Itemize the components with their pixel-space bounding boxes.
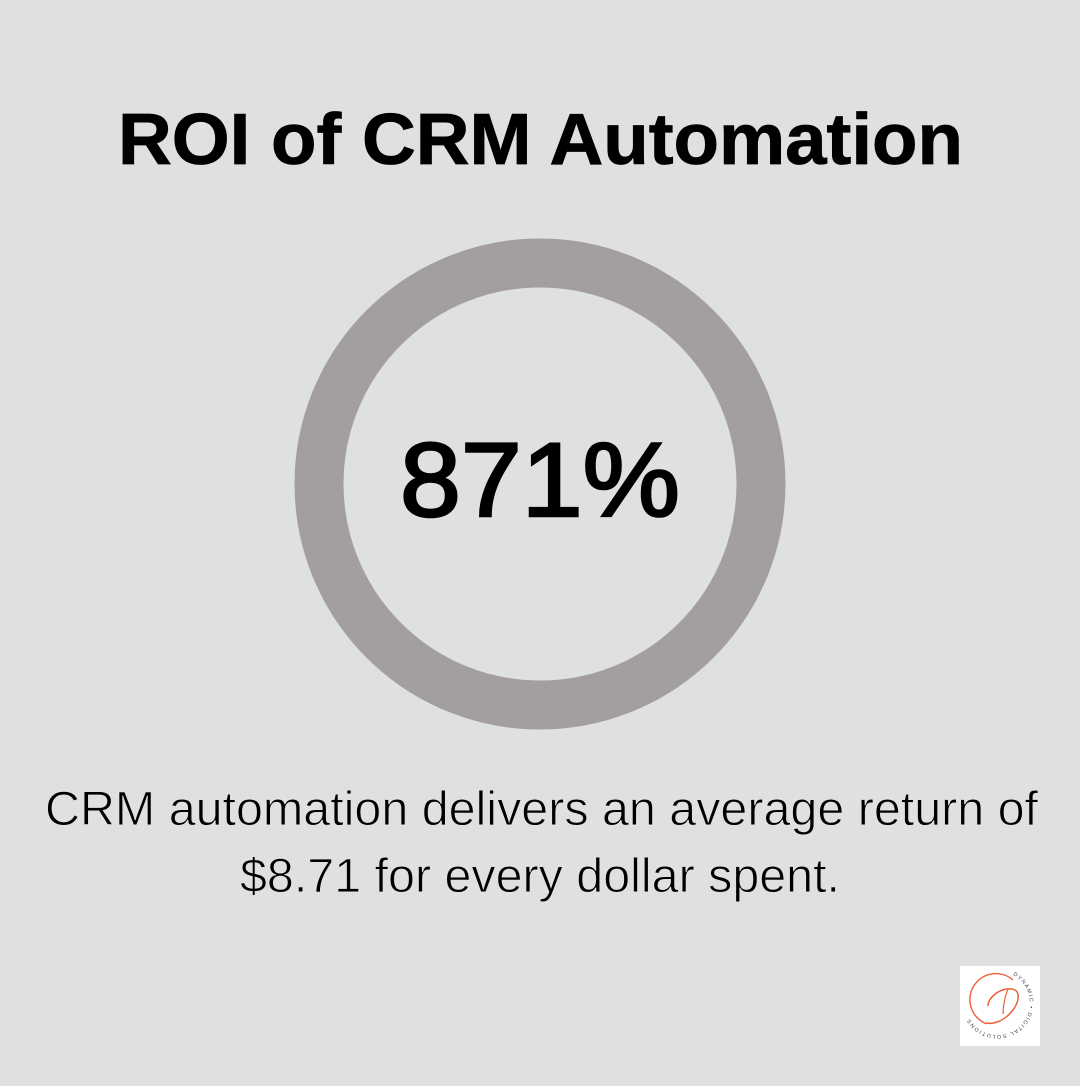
center value: 871%: 871%: [400, 422, 680, 539]
description text: $8.71 for every dollar spent.: [240, 850, 840, 903]
logo: Dynamic Digital Solutions: DYNAMIC • DIGITAL SOLUTIONS: [967, 972, 1034, 1039]
description text: [45, 783, 1039, 903]
donut ring: [319, 263, 761, 705]
title: ROI of CRM Automation: [118, 100, 963, 180]
description text: CRM automation delivers an average return of: [45, 783, 1039, 836]
